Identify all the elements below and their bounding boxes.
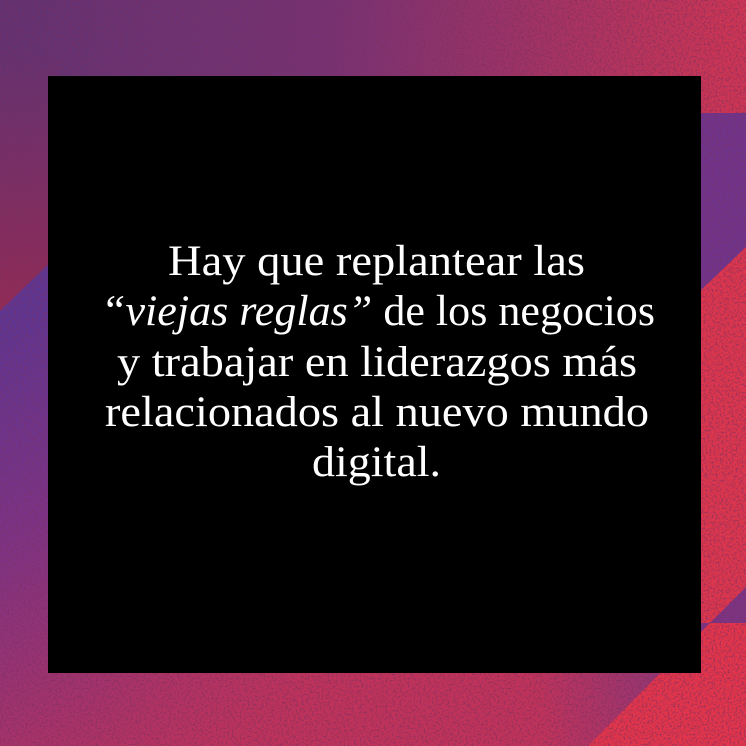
quote text: digital. [312,439,441,486]
shape: lower band toward red [100,660,700,746]
quote text [101,238,655,486]
shape: right purple block [690,113,746,300]
quote text: Hay que replantear las [168,238,585,285]
quote text: “viejas reglas” de los negocios [101,288,655,335]
shape: small purple triangle [701,587,746,632]
shape: left purple and lower gradient field [0,253,700,746]
panel: black quote box [48,76,701,673]
shape: top right band [690,60,746,113]
shape: right red field [690,100,746,746]
quote text: y trabajar en liderazgos más [117,339,637,386]
shape: lower band fading to purple [400,660,700,746]
shape: bottom right red wedge [588,623,746,746]
quote text: relacionados al nuevo mundo [105,389,649,436]
